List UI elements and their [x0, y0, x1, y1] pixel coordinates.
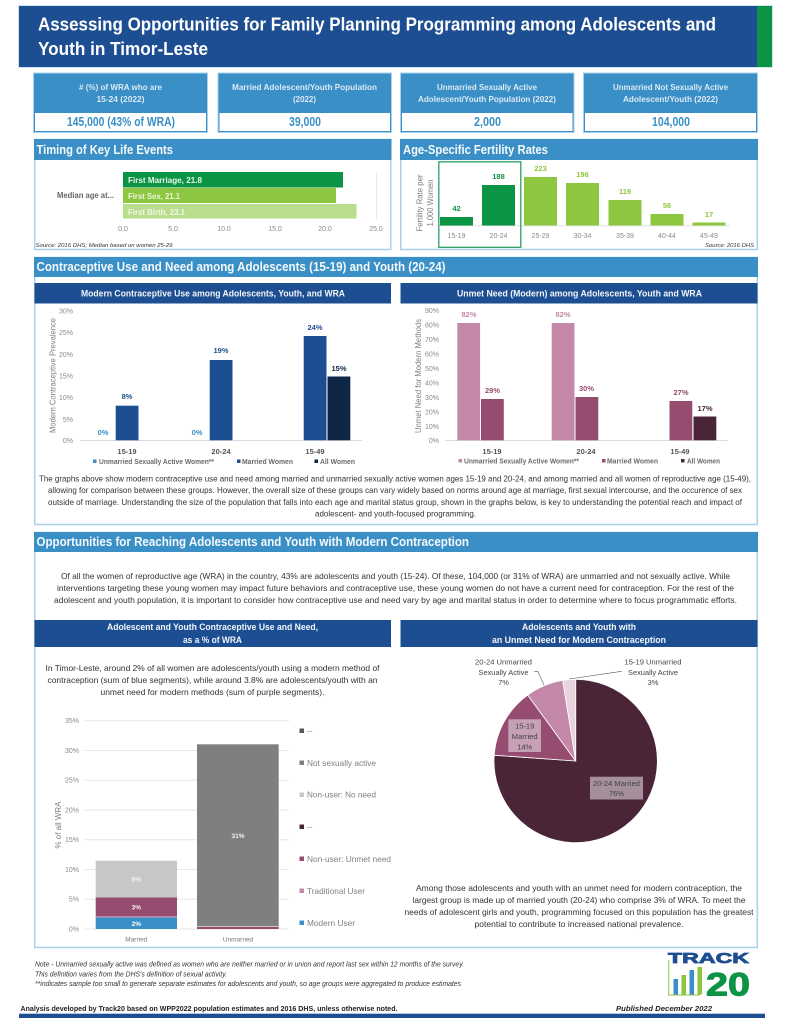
label: 20-24 unmarried sexually active: [475, 658, 532, 687]
stat card: WRA 15-24: [34, 73, 208, 132]
subheading: modern contraceptive use: Modern Contraceptive Use among Adolescents, Youth, and WRA: [81, 288, 345, 300]
subheading: unmet need for modern contraception: Adolescents and Youth with: [522, 622, 636, 633]
chart: unmet need: 0%: [429, 438, 439, 445]
stat card: unmarried sexually active: [400, 73, 574, 132]
legend: stacked bars: Traditional User: [307, 886, 365, 896]
label: 15-19 unmarried sexually active: [624, 658, 682, 687]
chart: fertility bars: 25-29: [532, 233, 550, 240]
stat card: unmarried sexually active: 2,000: [474, 115, 501, 129]
attribution line: Analysis developed by Track20 based on WPP2022 population estimates and 2016 DHS, unless otherwise noted.: [20, 1004, 398, 1013]
label: 15-19 married: 15-19: [515, 722, 534, 730]
chart: median age bars: [57, 172, 383, 233]
chart: fertility bars: 223: [534, 164, 547, 173]
chart: unmet need: 15-19: [482, 447, 502, 456]
text block: graph explanation: allowing for comparison between these groups. However, the overall size of these groups can vary widely based on norms around age at marriage, first sexual intercourse, and the occurence of sex: [48, 485, 743, 495]
chart: modern contraceptive use: Modern Contraceptive Prevalence: [48, 317, 58, 433]
chart: modern contraceptive use: 0%: [98, 428, 109, 437]
chart: median age bars: 25.0: [369, 226, 383, 233]
chart: fertility bars: 56: [663, 201, 671, 210]
stat card: WRA 15-24: 15-24 (2022): [96, 94, 145, 104]
chart: unmet need: Unmet Need for Modern Methods: [414, 319, 423, 433]
chart: unmet need: All Women: [687, 456, 720, 466]
heading: opportunities: Opportunities for Reaching Adolescents and Youth with Modern Contraception: [36, 534, 469, 549]
stat card: WRA 15-24: 145,000 (43% of WRA): [67, 115, 175, 129]
heading: age-specific fertility rates: Age-Specific Fertility Rates: [403, 142, 548, 157]
subheading: use and need as % of WRA: [34, 620, 391, 647]
label: 15-19 unmarried sexually active: 3%: [648, 678, 659, 687]
chart: fertility bars: [416, 162, 730, 247]
chart: stacked bars as % of WRA: 2%: [132, 921, 141, 928]
stat card: married population: (2022): [293, 94, 316, 104]
chart: modern contraceptive use: 24%: [307, 323, 323, 332]
chart: modern contraceptive use: 8%: [122, 392, 133, 401]
text block: graph explanation: outside of marriage. Understanding the size of the population that falls into each age and marital status group, shown in the graphs below, is key to understanding the potential reach and impact of: [48, 497, 743, 507]
title banner: Youth in Timor-Leste: [38, 38, 208, 59]
label: 15-19 unmarried sexually active: Sexually Active: [628, 668, 678, 677]
label: 15-19 unmarried sexually active: 15-19 Unmarried: [624, 658, 682, 666]
chart: modern contraceptive use: 10%: [59, 395, 73, 402]
stat card: unmarried not sexually active: 104,000: [652, 115, 690, 129]
panel: timing of key life events: [34, 139, 392, 250]
chart: modern contraceptive use: 15-19: [117, 447, 137, 456]
subheading: modern contraceptive use: [34, 283, 391, 304]
subheading: use and need as % of WRA: as a % of WRA: [183, 635, 242, 646]
legend: stacked bars: Non-user: Unmet need: [307, 854, 391, 864]
publication date: Published December 2022: [616, 1004, 713, 1013]
chart: modern contraceptive use: 19%: [213, 346, 229, 355]
stat card: WRA 15-24: # (%) of WRA who are: [79, 82, 162, 92]
text block: left chart summary: In Timor-Leste, around 2% of all women are adolescents/youth using a modern method of: [46, 663, 380, 673]
chart: modern contraceptive use: 15%: [331, 364, 347, 373]
chart: fertility bars: 35-39: [616, 233, 634, 240]
text block: opportunities intro: interventions targeting these young women may impact future behaviors and contraceptive use, these young women do not have a current need for contraception. For the rest of the: [57, 583, 734, 593]
chart: median age bars: 20.0: [318, 226, 332, 233]
legend: stacked bars: --: [307, 726, 313, 736]
chart: stacked bars as % of WRA: 20%: [65, 808, 79, 814]
label: 15-19 married: Married: [512, 732, 538, 741]
chart: unmet need: 20%: [425, 410, 439, 416]
chart: modern contraceptive use: 20-24: [211, 447, 231, 456]
text block: opportunities intro: [54, 571, 737, 605]
chart: unmet need: 50%: [425, 366, 439, 373]
title banner: Assessing Opportunities for Family Planning Programming among Adolescents and: [38, 14, 716, 34]
chart: pie of unmet need: [475, 658, 682, 843]
label: 15-19 married: [508, 719, 541, 752]
heading: timing of key life events: Timing of Key Life Events: [36, 142, 173, 157]
chart: unmet need: 90%: [425, 308, 439, 315]
chart: stacked bars as % of WRA: 6%: [132, 876, 141, 884]
chart: modern contraceptive use: 15%: [59, 374, 73, 380]
chart: stacked bars as % of WRA: % of all WRA: [54, 801, 63, 848]
chart: median age bars: 15.0: [268, 226, 282, 233]
logo: Track20: 20: [706, 966, 750, 1002]
chart: modern contraceptive use: [48, 308, 362, 466]
legend: stacked bars: [300, 726, 391, 928]
chart: fertility bars: 20-24: [490, 233, 508, 240]
chart: unmet need: Unmarried Sexually Active Women**: [464, 456, 579, 466]
chart: modern contraceptive use: Unmarried Sexually Active Women**: [99, 457, 214, 466]
chart: stacked bars as % of WRA: 10%: [65, 867, 79, 874]
chart: median age bars: 0.0: [118, 226, 128, 233]
chart: fertility bars: Fertility Rate per: [416, 174, 424, 232]
chart: unmet need: 60%: [425, 352, 439, 358]
stat card: unmarried not sexually active: [584, 73, 758, 132]
chart: stacked bars as % of WRA: Married: [125, 936, 148, 944]
source note: Source: 2016 DHS: [705, 243, 754, 249]
chart: unmet need: [414, 308, 728, 466]
chart: fertility bars: 119: [619, 187, 631, 196]
footnotes: [35, 962, 464, 988]
chart: modern contraceptive use: 0%: [192, 428, 203, 437]
chart: stacked bars as % of WRA: 15%: [65, 837, 79, 844]
panel: contraceptive use and need: [34, 257, 758, 524]
label: 20-24 married: 20-24 Married: [593, 779, 640, 788]
chart: modern contraceptive use: Married Women: [242, 457, 293, 466]
chart: unmet need: 20-24: [576, 447, 596, 456]
legend: stacked bars: Non-user: No need: [307, 790, 376, 800]
chart: median age bars: First Sex, 21.1: [128, 191, 180, 201]
title banner: [18, 6, 772, 68]
chart: unmet need: 40%: [425, 380, 439, 388]
chart: modern contraceptive use: 20%: [59, 352, 73, 359]
legend: stacked bars: Modern User: [307, 918, 355, 928]
chart: unmet need: 17%: [697, 404, 713, 413]
text block: left chart summary: unmet need for modern methods (sum of purple segments).: [100, 687, 324, 697]
text block: graph explanation: The graphs above show modern contraceptive use and need among married and unmarried sexually active women ages 15-19 and 20-24, and among married and all women of reproductive age (15-49),: [39, 474, 751, 484]
chart: modern contraceptive use: 25%: [59, 330, 73, 337]
chart: fertility bars: 17: [705, 210, 713, 219]
chart: stacked bars as % of WRA: 35%: [65, 718, 79, 725]
chart: median age bars: Median age at...: [57, 190, 114, 200]
label: 15-19 married: 14%: [517, 742, 533, 752]
logo: Track20: [668, 950, 750, 1002]
stat card: unmarried not sexually active: Unmarried Not Sexually Active: [613, 82, 728, 92]
label: 20-24 unmarried sexually active: 7%: [498, 678, 509, 687]
chart: fertility bars: 196: [576, 170, 589, 179]
chart: median age bars: 10.0: [217, 226, 231, 233]
chart: stacked bars as % of WRA: [54, 718, 391, 944]
chart: unmet need: 29%: [485, 386, 500, 395]
chart: fertility bars: 15-19: [448, 233, 466, 240]
source note: Source: 2016 DHS; Median based on women 25-29: [36, 243, 173, 249]
stat card: unmarried sexually active: Unmarried Sexually Active: [437, 82, 537, 92]
footnotes: Note - Unmarried sexually active was defined as women who are neither married or in union and report last sex within 12 months of the survey.: [35, 962, 464, 968]
chart: unmet need: 30%: [425, 395, 439, 402]
chart: unmet need: 80%: [425, 322, 439, 330]
chart: unmet need: 82%: [555, 310, 571, 319]
chart: fertility bars: 40-44: [658, 233, 676, 240]
stat card: unmarried not sexually active: Adolescent/Youth (2022): [623, 94, 718, 104]
subheading: unmet need for modern contraception: an Unmet Need for Modern Contraception: [492, 635, 666, 646]
logo: Track20: TRACK: [668, 950, 749, 967]
panel: opportunities for reaching adolescents and youth: [34, 532, 758, 948]
text block: pie summary: [404, 883, 754, 929]
label: 20-24 unmarried sexually active: 20-24 Unmarried: [475, 658, 532, 666]
chart: median age bars: 5.0: [168, 226, 178, 233]
chart: fertility bars: 45-49: [700, 233, 718, 240]
panel: age-specific fertility rates: [400, 139, 758, 250]
stat card: married population: [218, 73, 392, 132]
chart: modern contraceptive use: 5%: [63, 417, 73, 424]
chart: median age bars: First Marriage, 21.8: [128, 175, 202, 185]
footer bar: [19, 1014, 765, 1018]
chart: modern contraceptive use: 15-49: [305, 447, 325, 456]
text block: opportunities intro: adolescent and youth population, it is important to consider how contraceptive use and need vary by age and marital status in order to determine where to focus programmatic efforts.: [54, 595, 737, 605]
stat card: unmarried sexually active: Adolescent/Youth Population (2022): [418, 94, 556, 104]
subheading: unmet need: Unmet Need (Modern) among Adolescents, Youth and WRA: [457, 288, 702, 300]
heading: contraceptive use and need: Contraceptive Use and Need among Adolescents (15-19) and Youth (20-24): [36, 259, 446, 274]
text block: left chart summary: contraception (sum of blue segments), while around 3.8% are adolescents/youth with an: [48, 675, 378, 685]
text block: pie summary: needs of adolescent girls and youth, programming focused on this population has the greatest: [404, 907, 754, 917]
label: 20-24 married: [590, 777, 643, 800]
chart: unmet need: Married Women: [607, 456, 658, 466]
chart: stacked bars as % of WRA: Unmarried: [223, 936, 254, 944]
subheading: unmet need: [400, 283, 758, 304]
footnotes: **indicates sample too small to generate separate estimates for adolescents and youth, so age groups were aggregated to produce estimates: [35, 981, 461, 988]
chart: unmet need: 27%: [673, 388, 689, 397]
chart: fertility bars: 188: [492, 172, 505, 181]
chart: stacked bars as % of WRA: 31%: [231, 833, 245, 840]
text block: opportunities intro: Of all the women of reproductive age (WRA) in the country, 43% are adolescents and youth (15-24). Of these, 104,000 (or 31% of WRA) are unmarried and not sexually active. While: [61, 571, 730, 581]
text block: graph explanation: [39, 474, 751, 518]
text block: graph explanation: adolescent- and youth-focused programming.: [315, 508, 476, 518]
subheading: unmet need for modern contraception: [400, 620, 758, 647]
legend: stacked bars: --: [307, 822, 313, 832]
subheading: use and need as % of WRA: Adolescent and Youth Contraceptive Use and Need,: [107, 622, 318, 633]
chart: modern contraceptive use: All Women: [320, 457, 355, 466]
label: 20-24 married: 76%: [609, 789, 624, 798]
text block: pie summary: Among those adolescents and youth with an unmet need for modern contraception, the: [416, 883, 742, 893]
chart: fertility bars: 30-34: [574, 233, 592, 240]
chart: unmet need: 82%: [461, 310, 477, 319]
chart: stacked bars as % of WRA: 30%: [65, 748, 79, 755]
label: 20-24 unmarried sexually active: Sexually Active: [478, 668, 528, 677]
stat card: married population: 39,000: [289, 115, 321, 129]
chart: unmet need: 15-49: [670, 447, 690, 456]
legend: stacked bars: Not sexually active: [307, 758, 376, 768]
stat card: married population: Married Adolescent/Youth Population: [232, 82, 377, 92]
text block: left chart summary: [46, 663, 380, 697]
chart: unmet need: 30%: [579, 384, 594, 393]
chart: modern contraceptive use: 0%: [63, 438, 73, 445]
chart: unmet need: 70%: [425, 337, 439, 344]
chart: stacked bars as % of WRA: 3%: [132, 904, 141, 912]
chart: stacked bars as % of WRA: 25%: [65, 778, 79, 784]
text block: pie summary: potential to contribute to increased national prevalence.: [474, 919, 684, 929]
chart: modern contraceptive use: 30%: [59, 308, 73, 316]
footnotes: This definition varies from the DHS's definition of sexual activity.: [35, 972, 227, 978]
chart: median age bars: First Birth, 23.1: [128, 207, 185, 217]
chart: stacked bars as % of WRA: 0%: [69, 926, 79, 934]
chart: fertility bars: 1,000 Women: [426, 180, 435, 226]
chart: unmet need: 10%: [425, 424, 439, 431]
chart: fertility bars: 42: [452, 204, 461, 213]
text block: pie summary: largest group is made up of married youth (20-24) who comprise 3% of WRA. To meet the: [412, 895, 746, 905]
chart: stacked bars as % of WRA: 5%: [69, 896, 79, 904]
